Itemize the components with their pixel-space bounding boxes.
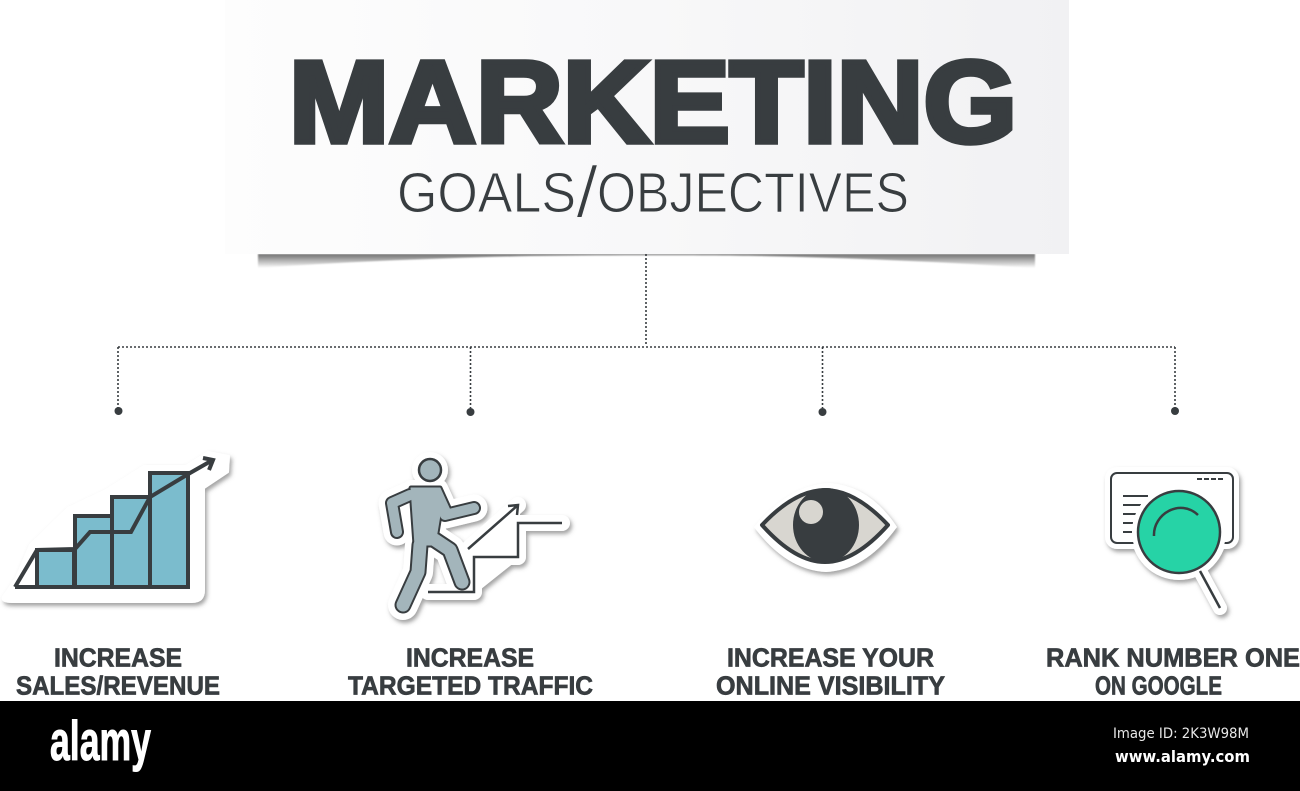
icon: person climbing stairs [392,459,562,605]
connector: dotted tree lines [118,254,1175,408]
label: rank number one on google [1046,642,1300,700]
label: increase your online visibility: INCREASE YOUR [727,642,934,672]
label: increase targeted traffic: INCREASE [406,642,534,672]
subtitle: goals/objectives: OBJECTIVES [597,161,909,225]
label: increase your online visibility [716,642,945,700]
label: increase sales/revenue [16,642,220,700]
label: increase your online visibility: ONLINE VISIBILITY [716,670,945,700]
label: rank number one on google: RANK NUMBER ONE [1046,642,1300,672]
title: MARKETING: MARKETING [289,37,1017,167]
label: increase sales/revenue: SALES/REVENUE [16,670,220,700]
label: increase targeted traffic [348,642,593,700]
subtitle: goals/objectives: / [576,153,598,233]
panel: title card [225,0,1069,268]
footer: stock photo bar [0,701,1300,791]
subtitle: goals/objectives [397,153,909,233]
subtitle: goals/objectives: GOALS [397,161,576,225]
label: rank number one on google: ON GOOGLE [1095,670,1222,700]
connector end dots [114,407,1179,416]
label: increase targeted traffic: TARGETED TRAFFIC [348,670,593,700]
label: increase sales/revenue: INCREASE [54,642,182,672]
website: www.alamy.com [1115,747,1250,766]
icon: search window with magnifying glass [1111,473,1233,608]
icon: rising bar chart with arrow [3,452,229,602]
footer logo: alamy [50,709,151,772]
image id: Image ID: 2K3W98M [1113,726,1249,742]
icon: eye [754,483,897,572]
